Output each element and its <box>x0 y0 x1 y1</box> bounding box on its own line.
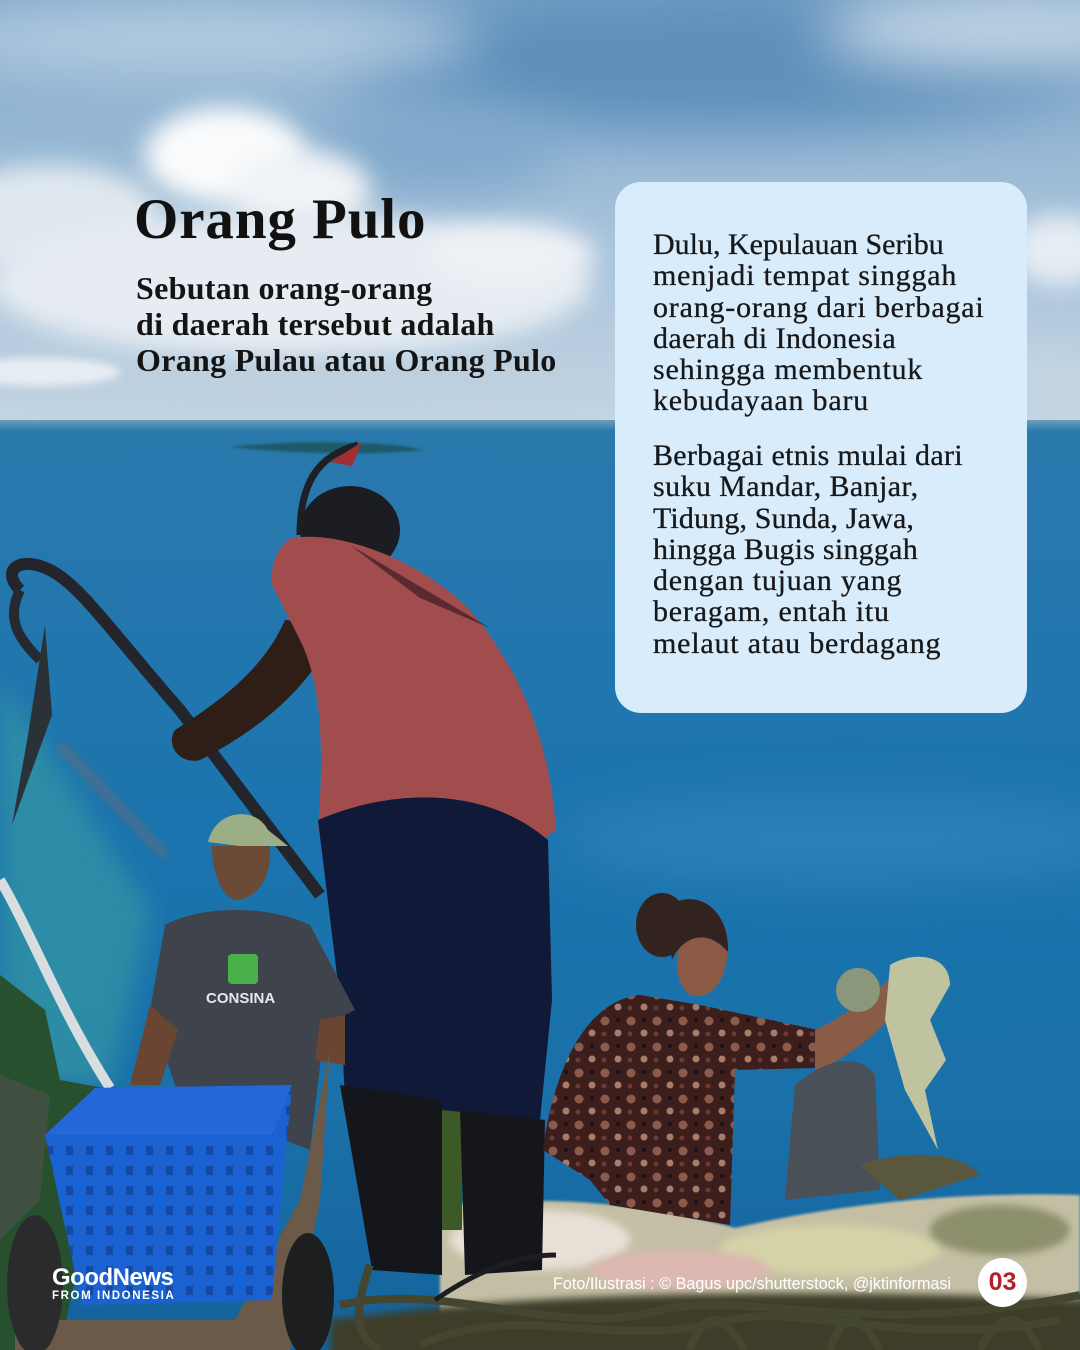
sea light streak <box>550 800 1080 880</box>
foreground tree patch <box>432 1090 462 1230</box>
coastal road and land <box>0 880 115 1350</box>
paragraph: history: orang-orang dari berbagai <box>653 291 985 324</box>
paragraph: ethnic groups: dengan tujuan yang <box>653 564 902 597</box>
cart with blue crate <box>7 1050 334 1350</box>
man with red shirt and harpoon <box>12 442 556 1275</box>
paragraph: ethnic groups: suku Mandar, Banjar, <box>653 470 919 503</box>
paragraph: history: sehingga membentuk <box>653 353 923 386</box>
subtitle <box>136 270 557 378</box>
paragraph: ethnic groups: Tidung, Sunda, Jawa, <box>653 502 914 535</box>
sky <box>0 0 1080 425</box>
paragraph: ethnic groups: hingga Bugis singgah <box>653 533 918 566</box>
woman in batik <box>543 893 925 1225</box>
shallow reef water <box>0 680 150 1085</box>
page number badge <box>978 1258 1027 1307</box>
paragraph: history <box>653 228 985 417</box>
paragraph: ethnic groups: beragam, entah itu <box>653 595 890 628</box>
panel: text card <box>615 182 1027 713</box>
paragraph: ethnic groups: melaut atau berdagang <box>653 627 941 660</box>
subtitle: Sebutan orang-orang <box>136 270 432 306</box>
subtitle: di daerah tersebut adalah <box>136 306 495 342</box>
paragraph: ethnic groups <box>652 439 963 660</box>
subtitle: Orang Pulau atau Orang Pulo <box>136 342 557 378</box>
rope coils <box>340 1255 1080 1350</box>
foreground seaweed pile <box>330 1194 1080 1350</box>
worker behind woman holding seaweed <box>785 957 980 1200</box>
logo: GoodNews from Indonesia <box>52 1264 175 1302</box>
title: Orang Pulo <box>134 188 426 251</box>
man with green cap <box>130 814 355 1150</box>
paragraph: ethnic groups: Berbagai etnis mulai dari <box>653 439 963 472</box>
page number badge: 03 <box>989 1268 1016 1296</box>
photo credit: Foto/Ilustrasi : © Bagus upc/shutterstock, @jktinformasi <box>553 1275 951 1293</box>
paragraph: history: daerah di Indonesia <box>653 322 896 355</box>
paragraph: history: Dulu, Kepulauan Seribu <box>653 228 944 261</box>
logo: GoodNews from Indonesia: FROM INDONESIA <box>52 1290 175 1302</box>
sea <box>0 420 1080 1350</box>
man with green cap: CONSINA <box>206 990 275 1007</box>
clouds <box>0 107 1080 410</box>
distant island <box>228 442 424 453</box>
logo: GoodNews from Indonesia: GoodNews <box>52 1264 173 1291</box>
paragraph: history: kebudayaan baru <box>653 384 869 417</box>
paragraph: history: menjadi tempat singgah <box>653 259 957 292</box>
